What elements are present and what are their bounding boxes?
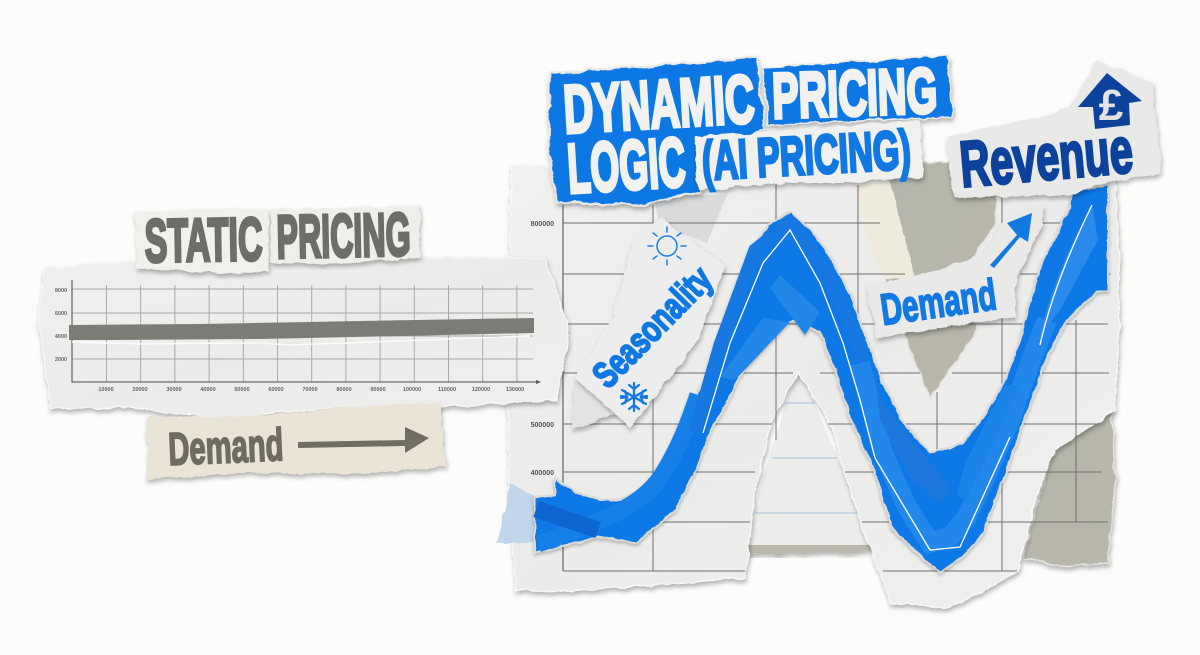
flat price line chart: 80000 <box>336 387 352 393</box>
flat price line chart <box>55 280 541 393</box>
demand label with arrow: Demand <box>167 418 284 475</box>
lighter ribbon patches <box>720 275 820 380</box>
flat price line chart: 100000 <box>403 387 421 393</box>
demand label with arrow <box>147 403 445 479</box>
torn shading piece <box>653 195 727 243</box>
blue price ribbon <box>535 185 1108 573</box>
flat price line chart: 10000 <box>98 387 114 393</box>
bottom right grey paper <box>1023 410 1115 566</box>
heading: static pricing: PRICING <box>276 200 411 271</box>
flat price line chart: 120000 <box>472 387 490 393</box>
torn graph paper <box>507 165 1120 608</box>
flat price line chart: 130000 <box>506 387 524 393</box>
dynamic price grid <box>531 185 1110 571</box>
heading: dynamic pricing logic: (AI PRICING) <box>700 118 912 192</box>
label: demand with rising arrow: Demand <box>878 270 999 335</box>
dynamic price grid: 800000 <box>531 221 554 228</box>
flat price line chart: 110000 <box>438 387 456 393</box>
torn chart paper <box>38 258 569 418</box>
heading: static pricing: STATIC <box>144 205 263 275</box>
flat price line chart: 70000 <box>302 387 318 393</box>
heading: dynamic pricing logic: PRICING <box>771 54 938 132</box>
flat price line chart: 60000 <box>268 387 284 393</box>
arch paper with faint rules <box>742 365 875 545</box>
ribbon tail translucent <box>497 484 550 543</box>
panel: dynamic pricing <box>497 54 1162 608</box>
heading: dynamic pricing logic: DYNAMIC <box>561 61 757 148</box>
cream strip <box>855 182 915 280</box>
panel: static pricing <box>38 200 569 479</box>
icon: up arrow <box>990 213 1032 268</box>
icon: pound up arrow <box>1078 73 1142 130</box>
flat price line chart: 4000 <box>55 334 67 340</box>
flat price line chart: 8000 <box>55 288 67 294</box>
dynamic price grid: 500000 <box>531 422 554 429</box>
flat price line chart: 6000 <box>55 311 67 317</box>
flat price line chart: 30000 <box>166 387 182 393</box>
flat price line chart: 2000 <box>55 357 67 363</box>
icon: arrow <box>298 427 429 453</box>
icon: sun <box>648 227 686 265</box>
flat price line chart: 40000 <box>200 387 216 393</box>
heading: dynamic pricing logic <box>548 54 952 208</box>
flat price line chart: 20000 <box>132 387 148 393</box>
upper grey paper <box>885 163 998 398</box>
flat price line chart: 90000 <box>370 387 386 393</box>
label: demand with rising arrow <box>867 205 1043 338</box>
dynamic price grid: 400000 <box>531 470 554 477</box>
label: revenue with pound arrow <box>946 60 1162 201</box>
flat price line chart: 50000 <box>234 387 250 393</box>
label: seasonality: Seasonality <box>584 258 720 396</box>
grey strip under the arch <box>740 528 870 555</box>
icon: snowflake <box>621 383 647 411</box>
icon: pound up arrow: £ <box>1099 81 1124 130</box>
label: seasonality <box>572 218 725 430</box>
heading: dynamic pricing logic: LOGIC <box>565 123 688 208</box>
